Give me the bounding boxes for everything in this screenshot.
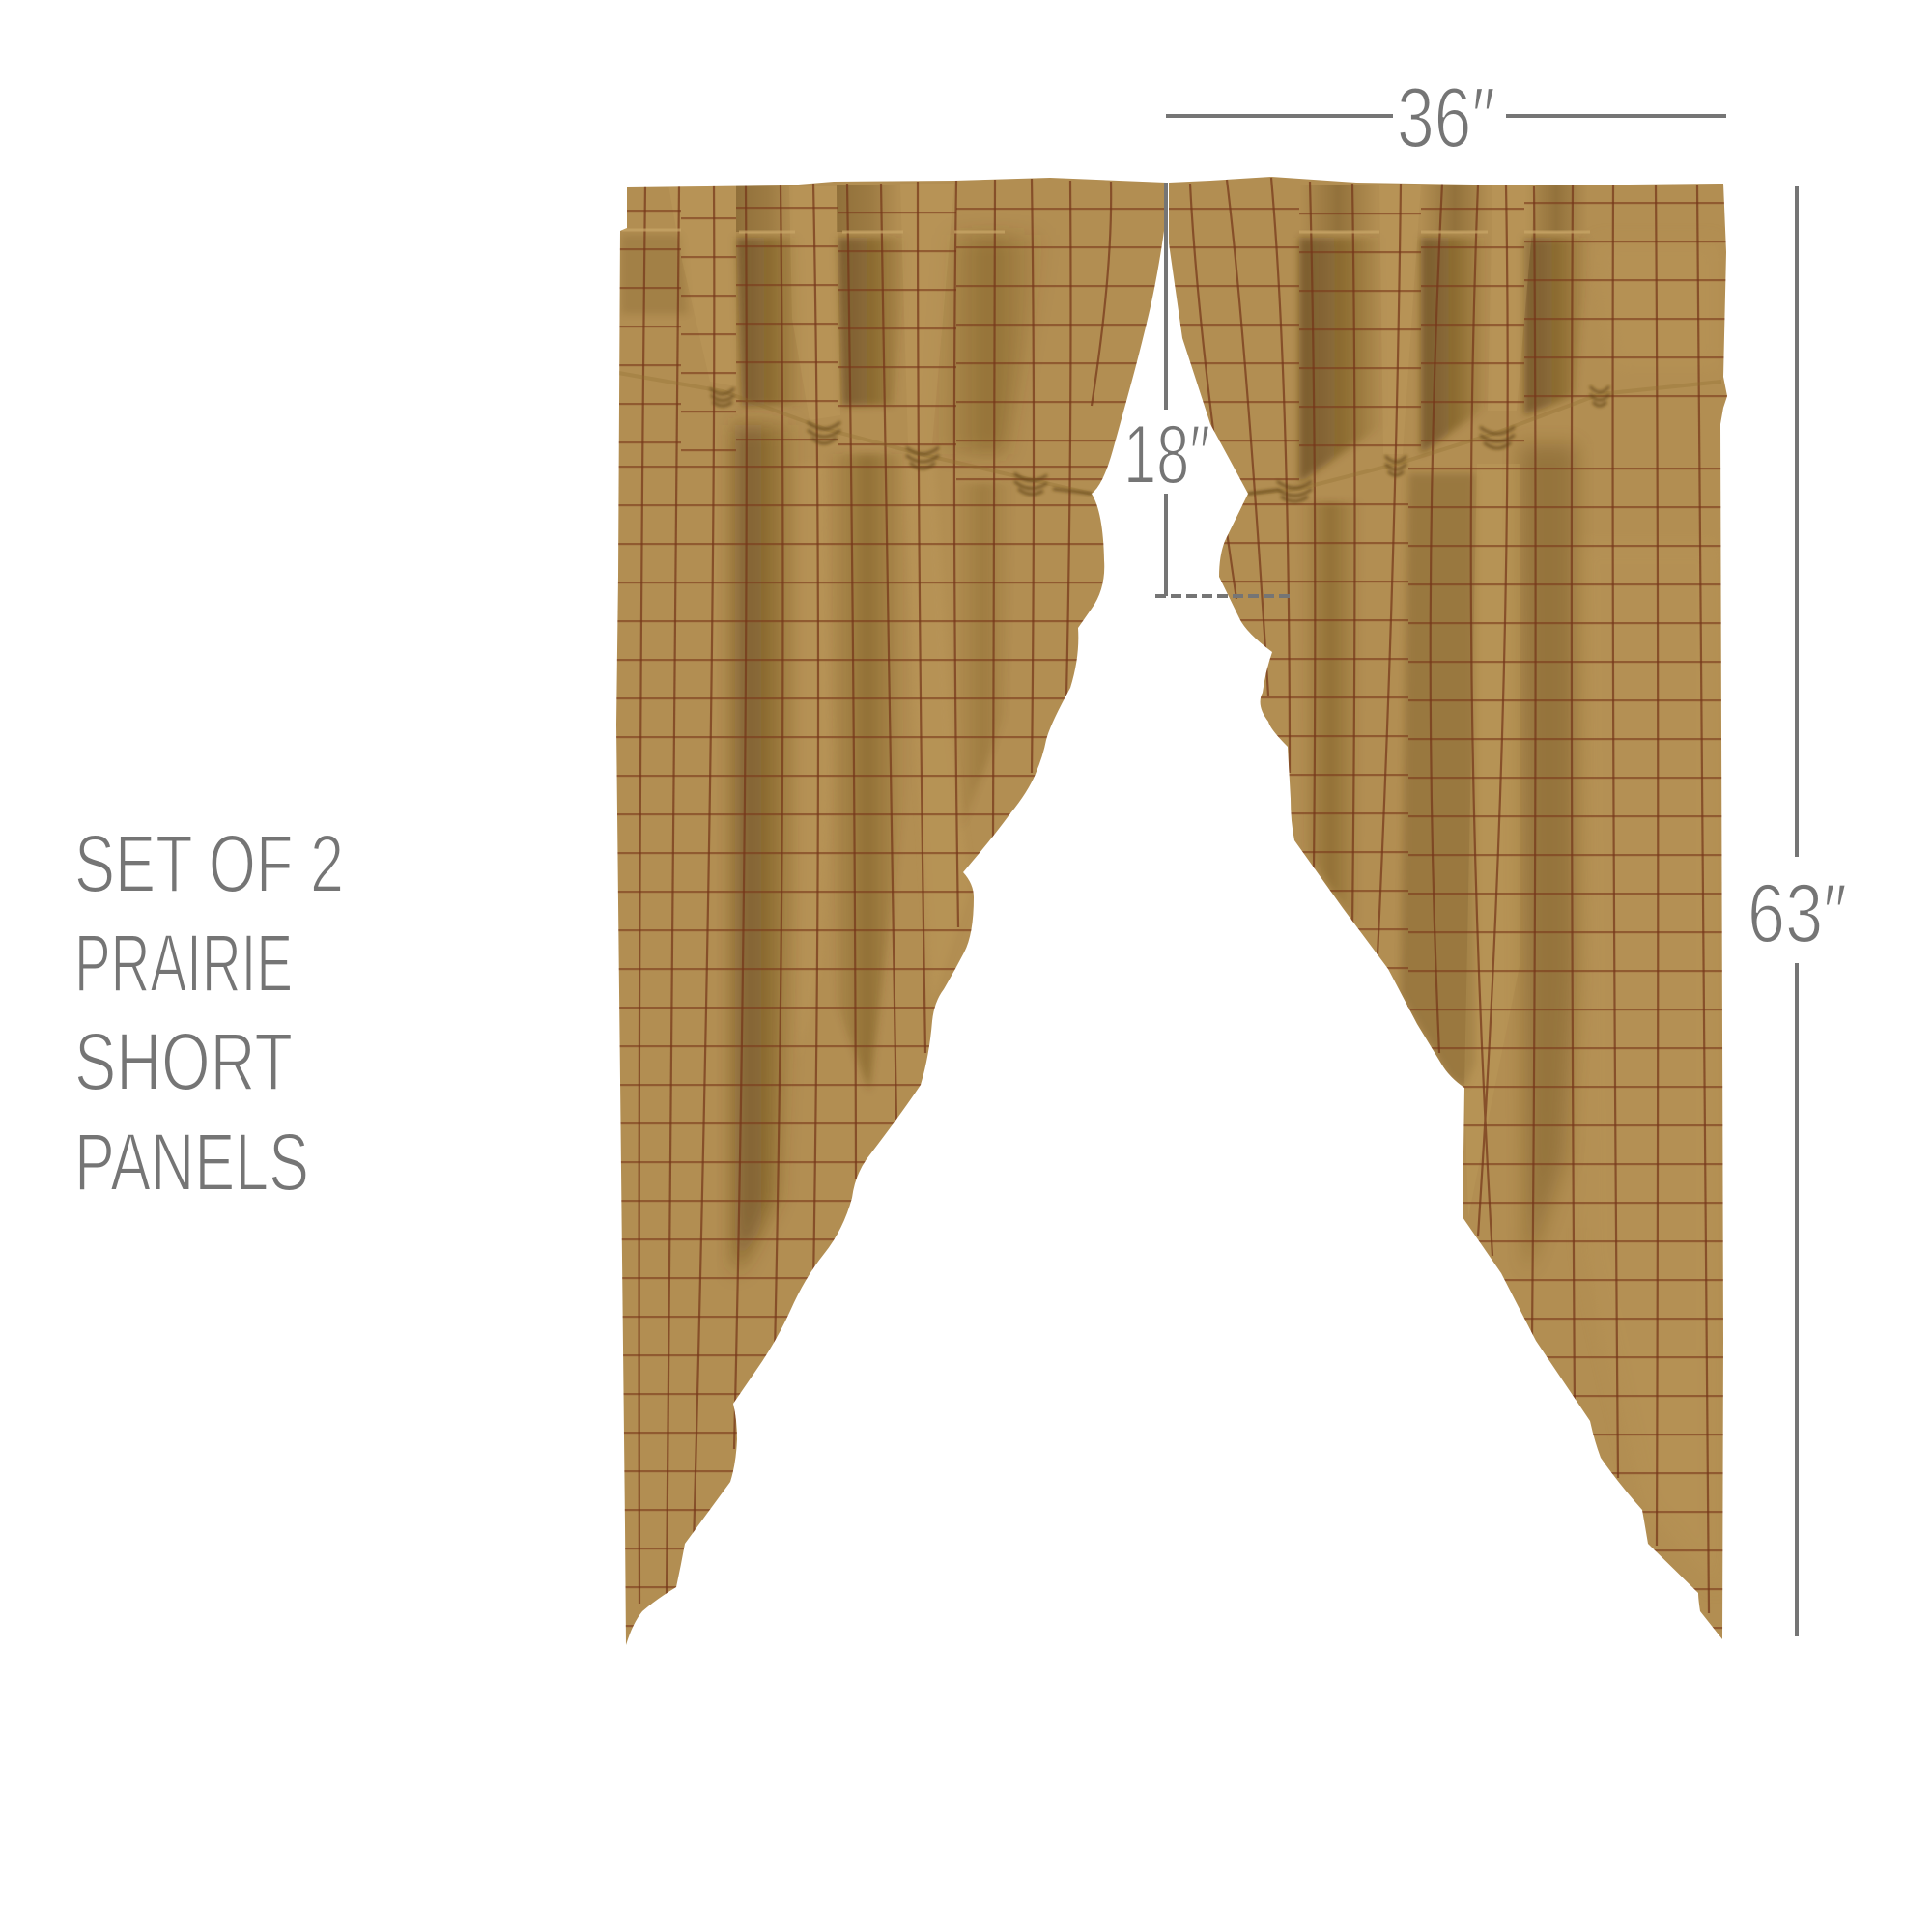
right curtain shirring band	[1248, 382, 1721, 494]
title: set of 2 prairie short panels: SET OF 2	[74, 818, 344, 909]
left curtain horizontal plaid	[609, 186, 1179, 1653]
right curtain horizontal plaid	[1159, 182, 1727, 1655]
left curtain fold shadows	[621, 185, 1048, 1275]
right curtain vertical plaid	[1190, 178, 1709, 1613]
right curtain light folds	[1265, 185, 1536, 1082]
title: set of 2 prairie short panels: SHORT	[74, 1016, 293, 1107]
right curtain gathers	[1248, 386, 1609, 501]
left curtain light folds	[668, 184, 971, 1063]
dimension: 36 inch width: 36″	[1397, 70, 1495, 165]
panel: right curtain	[1159, 174, 1739, 1655]
left curtain gathers	[710, 388, 1092, 495]
dimension: 18 inch drop: 18″	[1123, 409, 1210, 501]
title: set of 2 prairie short panels: PRAIRIE	[74, 918, 293, 1009]
title: set of 2 prairie short panels: PANELS	[74, 1117, 309, 1208]
dimension: 63 inch length: 63″	[1747, 867, 1847, 960]
panel: left curtain	[609, 174, 1179, 1653]
title: set of 2 prairie short panels	[74, 818, 344, 1208]
right curtain fold shadows	[1299, 185, 1590, 1275]
left curtain shirring band	[618, 373, 1092, 494]
right curtain sleeve seam	[1299, 230, 1590, 234]
left curtain sleeve seam	[622, 230, 1005, 232]
left curtain vertical plaid	[639, 179, 1111, 1604]
